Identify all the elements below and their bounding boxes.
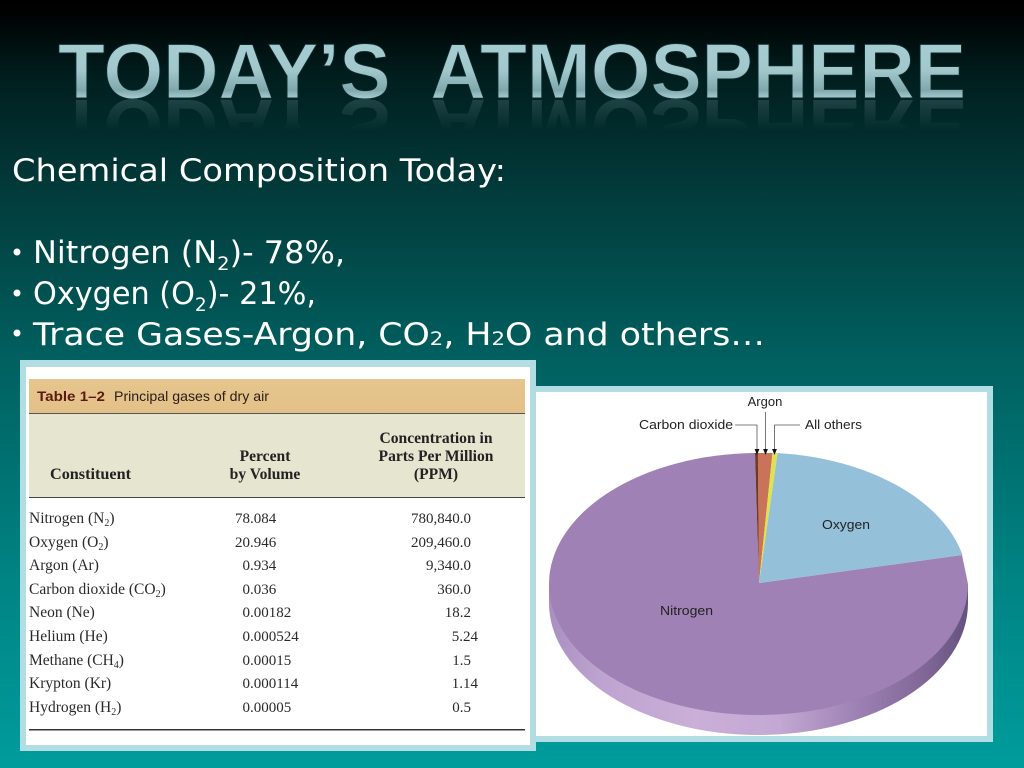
table column headers: by Volume: [230, 466, 300, 483]
table rows: 0.00015: [242, 653, 291, 669]
bullet: oxygen: Oxygen (O: [33, 276, 199, 312]
table rows: ): [103, 534, 108, 551]
table rows: ): [161, 581, 166, 598]
table title bar: [29, 379, 525, 413]
table rows: 4: [114, 660, 119, 671]
subheading: Chemical Composition Today:: [12, 153, 506, 189]
panel: table: [20, 360, 536, 751]
table rows: 0.000524: [242, 629, 299, 645]
pie side wall: [549, 584, 968, 735]
table column headers: Concentration in: [379, 430, 493, 447]
table rows: 2: [98, 542, 103, 553]
table column headers: [29, 413, 525, 498]
table rows: 0.036: [242, 582, 277, 598]
text block: composition: [12, 153, 765, 353]
table rows: 20.946: [235, 535, 277, 551]
label: oxygen: Oxygen: [822, 517, 870, 532]
table rows: 9,340.0: [426, 558, 471, 574]
label: all others: All others: [805, 417, 863, 432]
arrow: carbon dioxide: [735, 425, 759, 455]
table rows: 0.5: [452, 700, 471, 716]
arrow: all others: [772, 425, 800, 455]
title: [58, 27, 966, 171]
bullet: nitrogen: Nitrogen (N: [33, 235, 212, 271]
bullet: nitrogen: 2: [217, 253, 230, 275]
slice: all others: [759, 453, 778, 583]
table rows: 1.14: [452, 676, 478, 692]
table rows: 0.934: [242, 558, 277, 574]
bullet: oxygen: [14, 276, 316, 316]
bullet: trace gases: Trace Gases-Argon, CO 2, H 2O and others…: [32, 317, 765, 353]
table rows: Krypton (Kr): [29, 675, 111, 692]
bullet: oxygen: )- 21%,: [207, 276, 316, 312]
label: nitrogen: Nitrogen: [660, 603, 713, 618]
panel: pie chart: [530, 386, 993, 742]
bullet: nitrogen: [14, 235, 345, 275]
table rows: 0.00005: [242, 700, 291, 716]
slice: nitrogen: [549, 453, 968, 715]
table rows: Nitrogen (N: [29, 510, 104, 527]
title reflection: TODAY’S ATMOSPHERE: [58, 83, 966, 171]
table rows: ): [119, 652, 124, 669]
table rows: 2: [156, 589, 161, 600]
table rows: 0.000114: [242, 676, 299, 692]
table rows: 360.0: [437, 582, 471, 598]
table column headers: Constituent: [50, 466, 132, 483]
table rows: 2: [111, 707, 116, 718]
table title bar: Table 1–2: [37, 388, 105, 404]
table rows: 209,460.0: [411, 535, 471, 551]
table rows: Oxygen (O: [29, 534, 98, 551]
table rows: 78.084: [235, 511, 277, 527]
arrow: argon: [763, 412, 768, 455]
table rows: 1.5: [452, 653, 471, 669]
slice: argon: [758, 453, 772, 583]
table rows: Argon (Ar): [29, 557, 99, 574]
bullet: oxygen: 2: [195, 294, 207, 316]
table rows: Neon (Ne): [29, 604, 95, 621]
table column headers: Parts Per Million: [379, 448, 494, 465]
bullet: nitrogen: )- 78%,: [230, 235, 345, 271]
table rows: Carbon dioxide (CO: [29, 581, 156, 598]
table rows: ): [116, 699, 121, 716]
table rows: 5.24: [452, 629, 478, 645]
label: argon: Argon: [748, 394, 782, 409]
slice: oxygen: [759, 453, 962, 583]
table rows: 780,840.0: [411, 511, 471, 527]
label: carbon dioxide: Carbon dioxide: [639, 417, 733, 432]
table column headers: Percent: [240, 448, 291, 465]
table rows: 18.2: [445, 605, 471, 621]
table column headers: (PPM): [414, 466, 458, 483]
table rows: [29, 510, 478, 718]
table rows: Methane (CH: [29, 652, 114, 669]
table title bar: Principal gases of dry air: [114, 388, 269, 404]
slice: carbon dioxide: [755, 453, 759, 583]
title: TODAY’S ATMOSPHERE: [58, 27, 966, 115]
table rows: ): [109, 510, 114, 527]
table rows: Hydrogen (H: [29, 699, 111, 716]
table rows: 0.00182: [242, 605, 291, 621]
table rows: Helium (He): [29, 628, 108, 645]
table rows: 2: [104, 518, 109, 529]
